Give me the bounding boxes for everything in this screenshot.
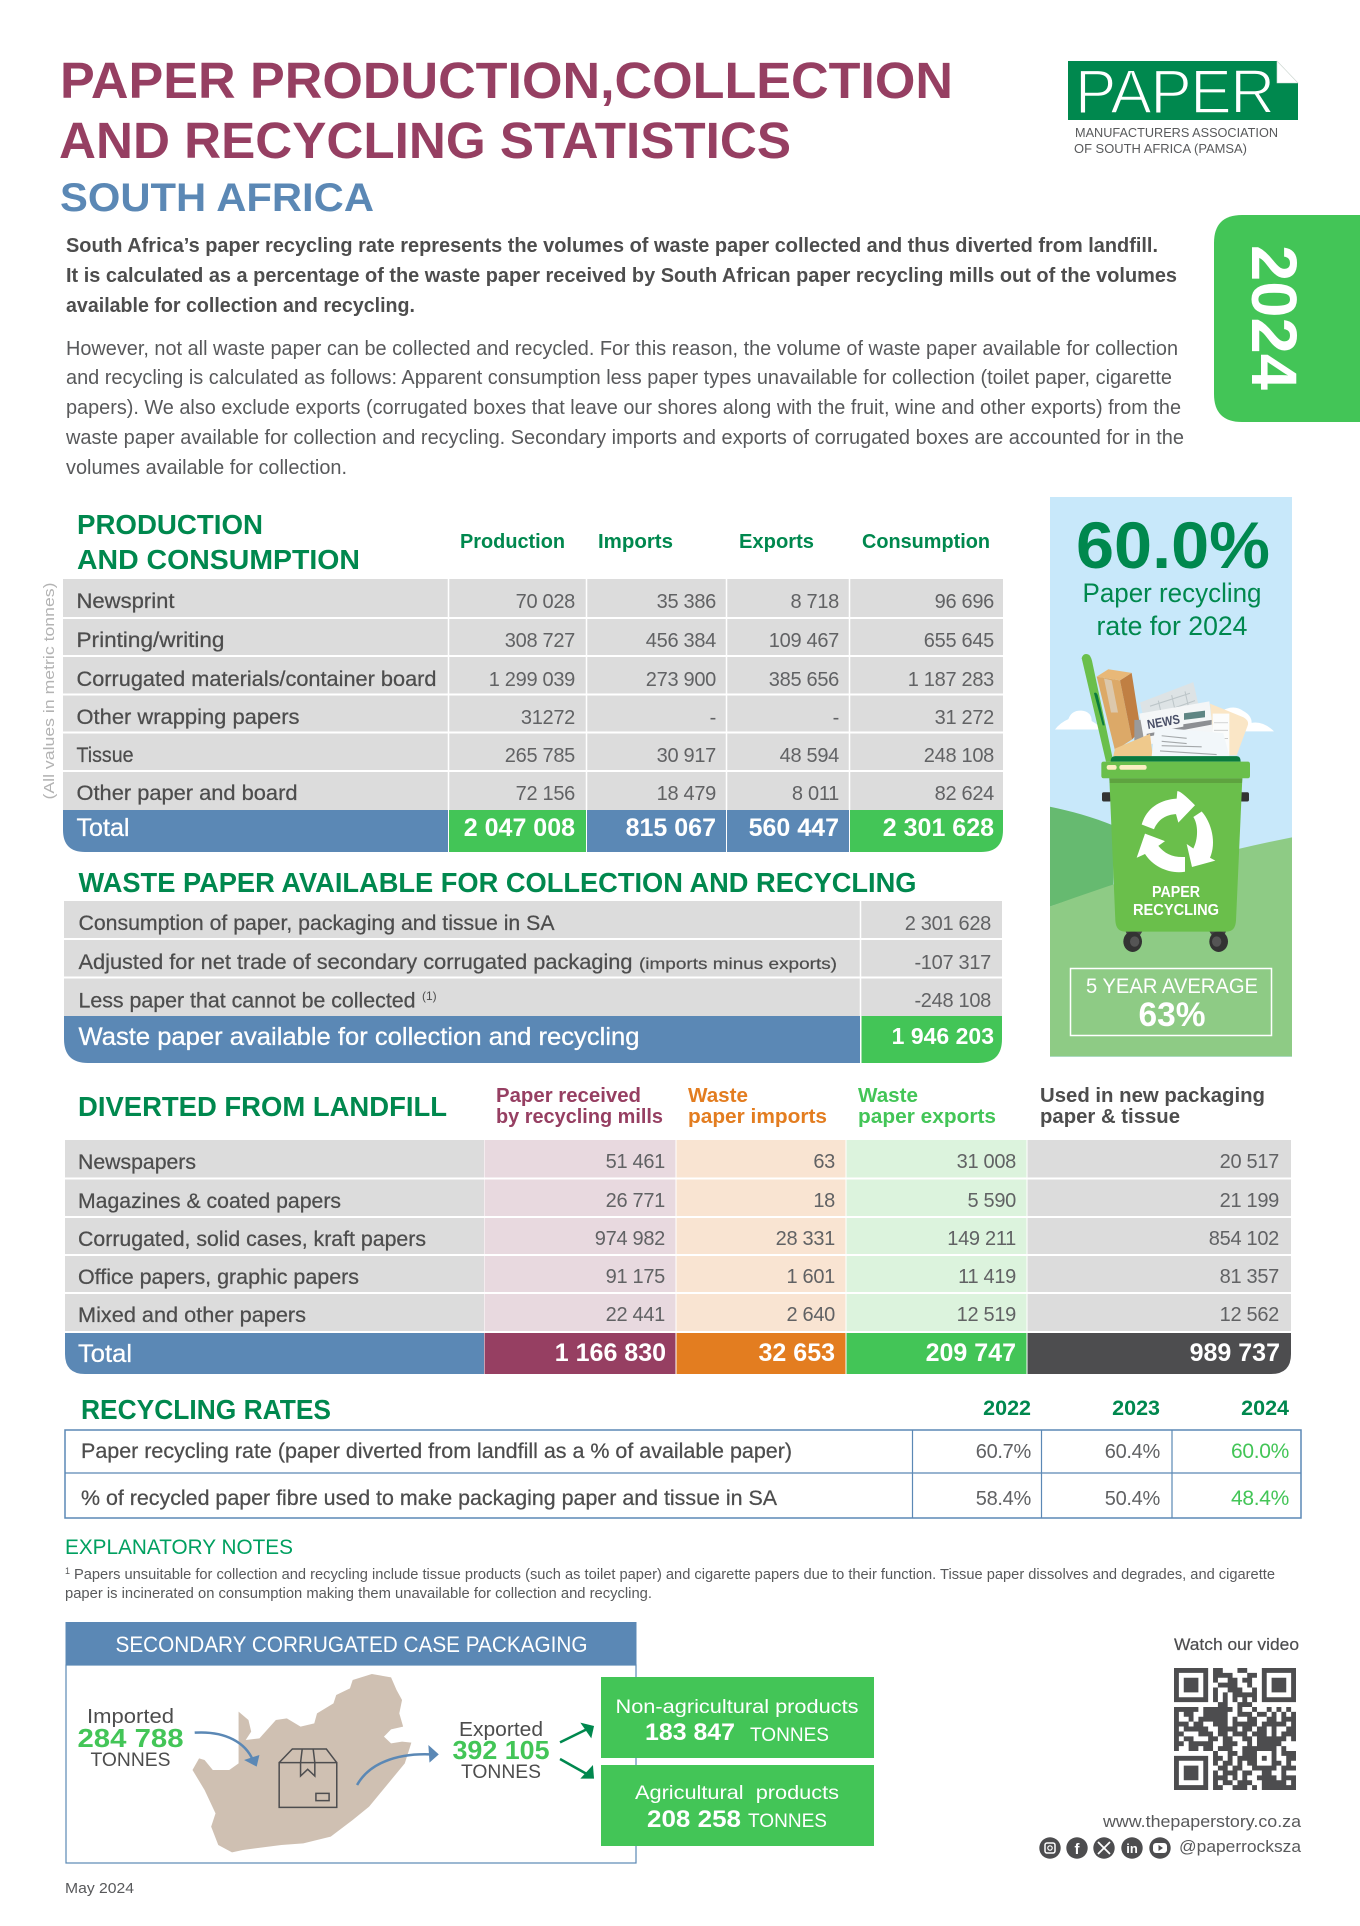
column headers: paper imports	[688, 1106, 827, 1128]
column headers: paper exports	[858, 1106, 996, 1128]
explanatory notes: EXPLANATORY NOTES	[65, 1536, 293, 1559]
callout: non-agricultural products: Non-agricultural products	[616, 1697, 858, 1718]
table: recycling rates: % of recycled paper fibre used to make packaging paper and tissue in SA	[81, 1487, 777, 1510]
total row: production: Total	[76, 814, 130, 842]
column headers: Paper received	[496, 1085, 641, 1107]
logo: PAMSA: OF SOUTH AFRICA (PAMSA)	[1074, 141, 1247, 156]
title	[59, 52, 953, 169]
column headers: Waste	[688, 1085, 748, 1107]
table rows: production: 48 594	[780, 745, 839, 767]
icon: recycling bin with paper: NEWS	[1146, 711, 1181, 732]
hills	[1050, 707, 1292, 1057]
exported stat	[452, 1719, 550, 1783]
table rows: production: 18 479	[657, 783, 716, 805]
year tab: 2024: 2024	[1238, 245, 1310, 390]
heading: production and consumption: AND CONSUMPTION	[77, 544, 360, 575]
column headers: Exports	[739, 531, 814, 553]
table rows: production: 109 467	[769, 630, 839, 652]
intro text: regular paragraph: waste paper available for collection and recycling. Secondary imports and exports of corrugated boxes are accounted for in the	[65, 427, 1184, 449]
table rows: production: Corrugated materials/container board	[76, 668, 436, 691]
table: recycling rates: 60.7%	[976, 1441, 1032, 1463]
table rows: production	[63, 579, 1003, 852]
callout: non-agricultural products: 183 847	[645, 1719, 735, 1746]
table rows: diverted: 26 771	[606, 1190, 665, 1212]
column headers: by recycling mills	[496, 1106, 663, 1128]
table rows: diverted: 12 519	[957, 1304, 1016, 1326]
intro text: regular paragraph: and recycling is calculated as follows: Apparent consumption less paper types unavailable for collection (toilet paper, cigarette	[66, 367, 1172, 389]
table rows: diverted: 12 562	[1220, 1304, 1279, 1326]
social icons and handle: @paperrocksza	[1179, 1837, 1302, 1856]
table rows: production: 248 108	[924, 745, 994, 767]
exported stat: Exported	[459, 1719, 543, 1741]
table rows: production: Printing/writing	[76, 629, 224, 652]
social icons and handle: in	[1126, 1841, 1138, 1856]
column headers: Consumption	[862, 531, 990, 553]
table rows: diverted: 22 441	[606, 1304, 665, 1326]
table rows: production: 456 384	[646, 630, 716, 652]
table rows: production: 31272	[521, 707, 575, 729]
heading: waste paper available: WASTE PAPER AVAILABLE FOR COLLECTION AND RECYCLING	[78, 867, 916, 898]
intro text: regular paragraph: papers). We also exclude exports (corrugated boxes that leave our shores along with the fruit, wine and other exports) from the	[66, 397, 1181, 419]
callout: agricultural products	[601, 1765, 874, 1846]
column headers: Waste	[858, 1085, 918, 1107]
panel header	[66, 1622, 636, 1665]
table rows: diverted: 28 331	[776, 1228, 835, 1250]
table: recycling rates: 50.4%	[1105, 1488, 1161, 1510]
column headers: paper & tissue	[1040, 1106, 1180, 1128]
stat caption: rate for 2024	[1096, 611, 1248, 641]
table rows: production: 8 718	[790, 591, 839, 613]
table rows: waste paper: Adjusted for net trade of secondary corrugated packaging	[78, 951, 632, 974]
social icons and handle	[1039, 1837, 1302, 1859]
callout: 5 year average: 5 YEAR AVERAGE	[1086, 975, 1258, 998]
table rows: diverted: Mixed and other papers	[78, 1304, 306, 1327]
year headers: 2022	[983, 1396, 1031, 1420]
stat: 60.0%: 60.0%	[1076, 508, 1270, 582]
year tab: 2024	[1214, 215, 1360, 422]
panel: waste paper available	[64, 867, 1002, 1063]
table rows: production: 308 727	[505, 630, 575, 652]
heading: recycling rates: RECYCLING RATES	[81, 1394, 331, 1425]
table rows: diverted: 2 640	[786, 1304, 835, 1326]
heading: production and consumption	[77, 509, 360, 575]
table rows: production: Tissue	[76, 744, 134, 767]
total row: production: 2 301 628	[883, 814, 994, 842]
callout: 5 year average: 63%	[1138, 996, 1206, 1034]
explanatory notes: paper is incinerated on consumption making them unavailable for collection and recycling.	[65, 1586, 652, 1602]
QR code	[1174, 1668, 1296, 1790]
callout: agricultural products: Agricultural products	[635, 1783, 839, 1804]
callout: agricultural products: 208 258	[647, 1806, 741, 1833]
table rows: waste paper: 2 301 628	[905, 913, 991, 935]
total row: waste paper: Waste paper available for collection and recycling	[78, 1023, 640, 1051]
icon: recycling bin with paper: RECYCLING	[1133, 902, 1219, 919]
intro text: bold paragraph	[66, 235, 1177, 317]
table: recycling rates: 48.4%	[1231, 1487, 1289, 1510]
table rows: production: 273 900	[646, 669, 716, 691]
social icons and handle: f	[1074, 1841, 1080, 1858]
column headers: Production	[460, 531, 565, 553]
year headers: 2024	[1241, 1396, 1289, 1420]
table: recycling rates: Paper recycling rate (paper diverted from landfill as a % of available paper)	[81, 1440, 792, 1463]
table rows: production: -	[710, 707, 716, 729]
table rows: production: Other paper and board	[76, 782, 298, 805]
table rows: diverted: 21 199	[1220, 1190, 1279, 1212]
table rows: production: 31 272	[935, 707, 994, 729]
logo: PAMSA: PAPER	[1075, 58, 1275, 127]
table rows: production: Other wrapping papers	[76, 706, 300, 729]
table rows: production: 35 386	[657, 591, 716, 613]
imported stat: TONNES	[90, 1750, 170, 1771]
table rows: diverted: 11 419	[958, 1266, 1016, 1288]
axis note: (All values in metric tonnes)	[42, 582, 58, 800]
total row: production	[63, 810, 1003, 852]
intro text: bold paragraph: It is calculated as a percentage of the waste paper received by South African paper recycling mills out of the volumes	[66, 265, 1177, 287]
panel: diverted from landfill	[65, 1085, 1291, 1374]
total row: production: 560 447	[749, 814, 839, 842]
title: AND RECYCLING STATISTICS	[59, 112, 791, 169]
column headers: Imports	[598, 531, 673, 553]
table rows: diverted: Office papers, graphic papers	[78, 1266, 359, 1289]
table rows: diverted: 974 982	[595, 1228, 665, 1250]
imported stat	[78, 1706, 184, 1771]
intro text: bold paragraph: available for collection and recycling.	[66, 295, 415, 317]
table rows: waste paper: Less paper that cannot be collected	[78, 990, 416, 1012]
table rows: diverted: 854 102	[1209, 1228, 1279, 1250]
table rows: diverted: 63	[813, 1151, 835, 1173]
callout: non-agricultural products	[601, 1677, 874, 1758]
table rows: production: 1 299 039	[489, 669, 575, 691]
table rows: production: 385 656	[769, 669, 839, 691]
table rows: diverted: 1 601	[786, 1266, 835, 1288]
imported stat: 284 788	[78, 1723, 184, 1753]
title: PAPER PRODUCTION,COLLECTION	[60, 52, 953, 109]
video label: Watch our video	[1174, 1636, 1299, 1654]
column headers: Used in new packaging	[1040, 1085, 1265, 1107]
year headers	[983, 1396, 1289, 1420]
exported stat: TONNES	[461, 1762, 541, 1783]
heading: production and consumption: PRODUCTION	[77, 509, 263, 540]
table: recycling rates: 60.4%	[1105, 1441, 1161, 1463]
table rows: diverted: 51 461	[606, 1151, 665, 1173]
table rows: diverted: Magazines & coated papers	[78, 1190, 341, 1213]
table rows: production: 655 645	[924, 630, 994, 652]
panel: production and consumption	[42, 509, 1003, 852]
year headers: 2023	[1112, 1396, 1160, 1420]
panel: secondary corrugated case packaging	[66, 1622, 874, 1863]
panel: recycling rate illustration	[1050, 497, 1292, 1057]
table rows: production: 70 028	[516, 591, 575, 613]
callout: agricultural products: TONNES	[748, 1811, 827, 1832]
table rows: waste paper: (imports minus exports)	[639, 956, 837, 973]
total row: waste paper	[64, 1016, 1002, 1063]
panel: recycling rates	[65, 1394, 1301, 1518]
table rows: waste paper: (1)	[422, 989, 437, 1003]
map: South Africa with box and arrows	[192, 1674, 439, 1852]
table rows: waste paper	[64, 901, 1002, 1063]
table rows: diverted: 91 175	[606, 1266, 665, 1288]
table rows: production: Newsprint	[76, 590, 175, 613]
table rows: production: 30 917	[657, 745, 716, 767]
table rows: diverted: 149 211	[947, 1228, 1016, 1250]
stat caption: Paper recycling	[1082, 578, 1262, 608]
table rows: waste paper: -107 317	[914, 952, 991, 974]
column headers	[496, 1085, 1265, 1128]
intro text: regular paragraph: However, not all waste paper can be collected and recycled. For this reason, the volume of waste paper available for collection	[66, 338, 1178, 360]
icon: recycling bin with paper: PAPER	[1152, 884, 1200, 901]
table rows: diverted: Corrugated, solid cases, kraft papers	[78, 1228, 426, 1251]
subtitle: South Africa: SOUTH AFRICA	[60, 176, 374, 220]
exported stat: 392 105	[452, 1735, 550, 1765]
callout: non-agricultural products: TONNES	[750, 1725, 829, 1746]
total row: diverted: 1 166 830	[555, 1339, 666, 1367]
intro text: bold paragraph: South Africa’s paper recycling rate represents the volumes of waste paper collected and thus diverted from landfill.	[66, 235, 1158, 257]
logo: PAMSA	[1068, 58, 1298, 156]
panel header: SECONDARY CORRUGATED CASE PACKAGING	[116, 1632, 588, 1657]
table rows: production: 1 187 283	[908, 669, 994, 691]
table rows: waste paper: Consumption of paper, packaging and tissue in SA	[78, 912, 554, 935]
total row: waste paper: 1 946 203	[892, 1023, 994, 1049]
total row: diverted	[65, 1333, 1291, 1374]
table rows: production: 265 785	[505, 745, 575, 767]
explanatory notes: 1	[65, 1566, 70, 1576]
total row: production: 815 067	[626, 814, 716, 842]
table rows: diverted	[65, 1140, 1291, 1331]
table rows: production: 8 011	[792, 783, 839, 805]
intro text: regular paragraph	[65, 338, 1184, 479]
total row: diverted: Total	[78, 1340, 132, 1368]
table rows: diverted: 20 517	[1220, 1151, 1279, 1173]
table rows: waste paper: -248 108	[914, 990, 991, 1012]
heading: diverted from landfill: DIVERTED FROM LANDFILL	[78, 1091, 447, 1122]
column headers	[460, 531, 990, 553]
table rows: diverted: 18	[813, 1190, 835, 1212]
logo: PAMSA: MANUFACTURERS ASSOCIATION	[1075, 125, 1278, 140]
imported stat: Imported	[87, 1706, 174, 1728]
date: May 2024	[65, 1880, 134, 1897]
explanatory notes: Papers unsuitable for collection and recycling include tissue products (such as toilet paper) and cigarette papers due to their function. Tissue paper dissolves and degrades, and cigarette	[74, 1567, 1275, 1583]
intro text: regular paragraph: volumes available for collection.	[66, 457, 347, 479]
table: recycling rates	[65, 1430, 1301, 1518]
total row: production: 2 047 008	[464, 814, 575, 842]
table rows: production: 82 624	[935, 783, 994, 805]
table rows: diverted: 31 008	[957, 1151, 1016, 1173]
total row: diverted: 989 737	[1190, 1339, 1280, 1367]
website: www.thepaperstory.co.za	[1102, 1812, 1302, 1831]
table rows: diverted: Newspapers	[78, 1151, 196, 1174]
table rows: production: 72 156	[516, 783, 575, 805]
table rows: production: -	[833, 707, 839, 729]
table rows: production: 96 696	[935, 591, 994, 613]
total row: diverted: 32 653	[759, 1339, 835, 1367]
table rows: diverted: 5 590	[967, 1190, 1016, 1212]
icon: recycling bin with paper	[1082, 654, 1250, 952]
arrows: to export categories	[560, 1723, 594, 1779]
explanatory notes	[65, 1536, 1275, 1602]
total row: diverted: 209 747	[926, 1339, 1016, 1367]
table: recycling rates: 58.4%	[976, 1488, 1032, 1510]
table rows: diverted: 81 357	[1220, 1266, 1279, 1288]
stat caption	[1082, 578, 1262, 641]
table: recycling rates: 60.0%	[1231, 1440, 1289, 1463]
callout: 5 year average	[1070, 968, 1272, 1036]
